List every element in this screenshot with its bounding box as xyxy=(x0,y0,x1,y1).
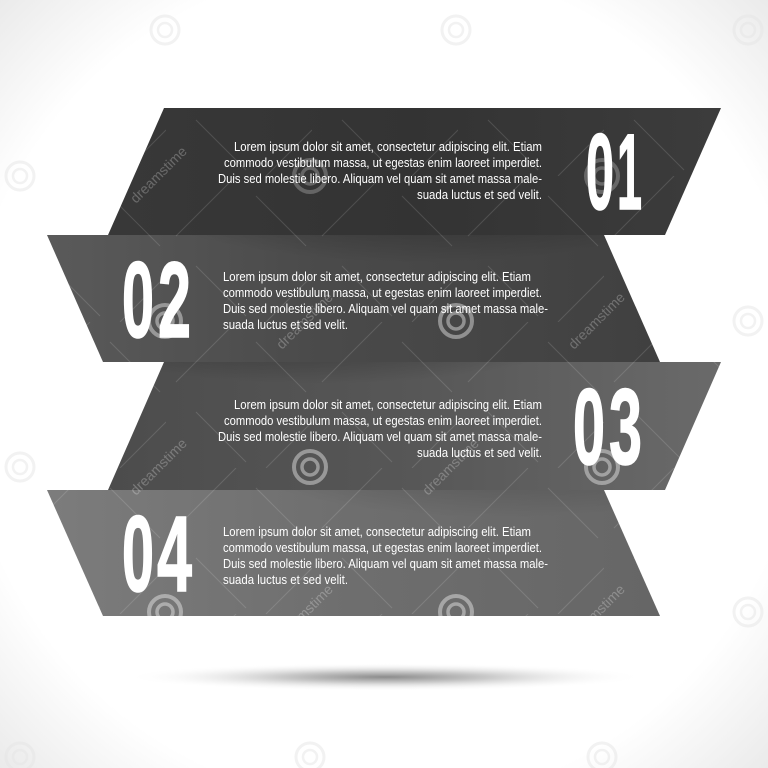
number 04: 0 xyxy=(122,493,154,614)
number 02: 2 xyxy=(158,239,191,360)
text block 01 xyxy=(218,139,542,202)
infographic: 1 xyxy=(617,111,642,232)
text block 03 xyxy=(218,397,542,460)
panel: ribbon 03 xyxy=(108,362,721,490)
text block 04: Duis sed molestie libero. Aliquam vel quam sit amet massa male- xyxy=(223,556,548,571)
text block 04 xyxy=(223,524,548,587)
text block 03: Duis sed molestie libero. Aliquam vel quam sit amet massa male- xyxy=(218,429,542,444)
watermark text: dreamstime xyxy=(127,143,190,206)
panel: ribbon 01 xyxy=(108,108,721,235)
text block 01: Lorem ipsum dolor sit amet, consectetur adipiscing elit. Etiam xyxy=(234,139,542,154)
watermark text: dreamstime xyxy=(273,581,336,644)
text block 02: suada luctus et sed velit. xyxy=(223,317,348,332)
panel: ribbon 02 xyxy=(47,235,660,362)
text block 02: commodo vestibulum massa, ut egestas enim laoreet imperdiet. xyxy=(223,285,542,300)
text block 01: suada luctus et sed velit. xyxy=(417,187,542,202)
text block 02: Lorem ipsum dolor sit amet, consectetur adipiscing elit. Etiam xyxy=(223,269,531,284)
watermark text: dreamstime xyxy=(273,289,336,352)
text block 03: commodo vestibulum massa, ut egestas enim laoreet imperdiet. xyxy=(224,413,542,428)
watermark crossing lines xyxy=(47,108,721,616)
text block 01: commodo vestibulum massa, ut egestas enim laoreet imperdiet. xyxy=(224,155,542,170)
number 04: 4 xyxy=(157,493,192,614)
panel: ribbon 04 xyxy=(47,490,660,616)
number 03: 3 xyxy=(609,366,642,487)
text block 02: Duis sed molestie libero. Aliquam vel quam sit amet massa male- xyxy=(223,301,548,316)
watermark spirals xyxy=(149,160,618,628)
floor shadow xyxy=(125,663,645,691)
text block 02 xyxy=(223,269,548,332)
text block 04: commodo vestibulum massa, ut egestas enim laoreet imperdiet. xyxy=(223,540,542,555)
text block 01: Duis sed molestie libero. Aliquam vel quam sit amet massa male- xyxy=(218,171,542,186)
text block 04: suada luctus et sed velit. xyxy=(223,572,348,587)
number 02: 0 xyxy=(122,239,154,360)
number 01: 0 xyxy=(586,111,614,232)
watermark text: dreamstime xyxy=(127,435,190,498)
watermark text xyxy=(127,143,628,644)
watermark text: dreamstime xyxy=(565,289,628,352)
text block 04: Lorem ipsum dolor sit amet, consectetur adipiscing elit. Etiam xyxy=(223,524,531,539)
watermark text: dreamstime xyxy=(565,581,628,644)
text block 03: Lorem ipsum dolor sit amet, consectetur adipiscing elit. Etiam xyxy=(234,397,542,412)
watermark text: dreamstime xyxy=(419,435,482,498)
number 03: 0 xyxy=(573,366,605,487)
text block 03: suada luctus et sed velit. xyxy=(417,445,542,460)
